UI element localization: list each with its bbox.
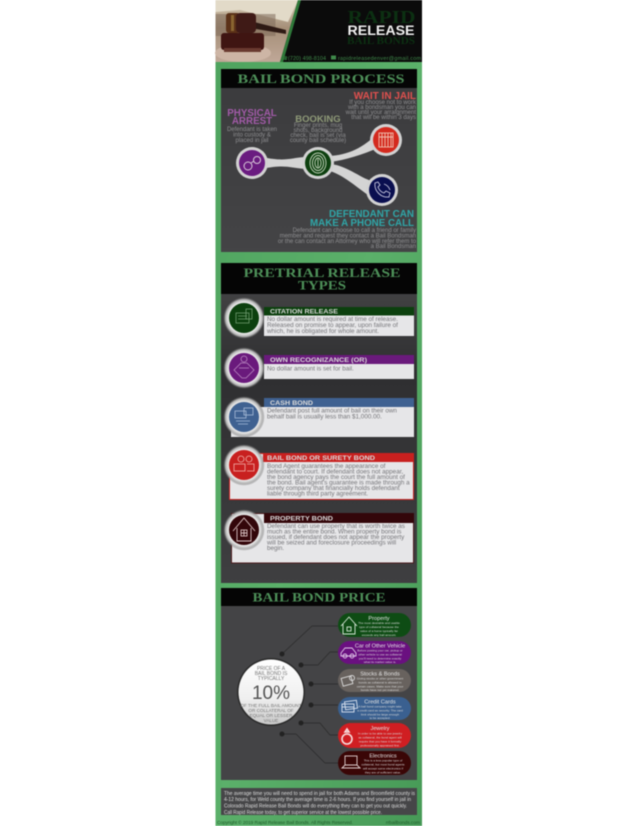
step: physical arrest: placed in jail xyxy=(235,138,269,144)
icon: car xyxy=(341,648,356,658)
card: property bond: begin. xyxy=(267,545,284,552)
panel: pretrial release types xyxy=(221,263,417,583)
step: defendant can make a phone call: a Bail Bondsman xyxy=(371,244,416,250)
text block: average jail time xyxy=(221,788,417,816)
card: bail bond or surety bond: BAIL BOND OR SURETY BOND xyxy=(267,455,375,462)
central circle: 10 percent: VALUE xyxy=(264,718,278,723)
pill: property: exceeds any bail amount. xyxy=(362,633,396,637)
card: bail bond or surety bond: liable through third party agreement. xyxy=(267,490,368,498)
icon: house xyxy=(341,617,357,634)
pill: electronics: collateral, but most bond agents xyxy=(361,762,405,766)
step: physical arrest: Defendant is taken xyxy=(227,127,277,133)
step: wait in jail: with a bondsman you can xyxy=(347,105,416,111)
pill: car or other vehicle: Car of Other Vehicle xyxy=(355,644,405,650)
card: bail bond or surety bond: surety company that financially holds defendant xyxy=(267,485,400,492)
step: defendant can make a phone call xyxy=(278,174,417,250)
card: cash bond: CASH BOND xyxy=(270,400,313,407)
pill: credit cards xyxy=(338,697,411,720)
panel: bail bond price xyxy=(221,588,417,780)
icon: house xyxy=(233,518,255,541)
contact line: ☎ xyxy=(281,55,289,62)
icon: jail bars xyxy=(379,133,393,147)
footer: copyright xyxy=(217,819,420,826)
text block: average jail time: Call Rapid Release today, to get superior service at the lowest possible price. xyxy=(224,810,382,816)
step: wait in jail: WAIT IN JAIL xyxy=(354,91,416,102)
heading: pretrial release types: TYPES xyxy=(298,278,346,292)
pill: credit cards: to be accepted. xyxy=(370,716,391,720)
card: citation release: CITATION RELEASE xyxy=(270,308,339,316)
panel: bail bond process xyxy=(221,69,417,252)
card: bail bond or surety bond: the bond agency pays the court the full amount of xyxy=(267,474,405,481)
step: booking: shots, background xyxy=(293,128,343,134)
icon: fingerprint xyxy=(310,153,326,173)
step: physical arrest: into custody & xyxy=(233,132,271,138)
step: booking: Finger prints, mug xyxy=(294,123,342,129)
pill: car or other vehicle: you'll need to determine exactly xyxy=(359,656,402,660)
card: bail bond or surety bond xyxy=(224,444,414,500)
heading: pretrial release types: PRETRIAL RELEASE xyxy=(244,265,400,280)
heading: bail bond price xyxy=(221,588,417,606)
step: defendant can make a phone call: member and request they contact a Bail Bondsman xyxy=(280,234,416,240)
card: property bond: issued, if defendant does not appear the property xyxy=(267,534,405,541)
contact line: rapidreleasedenver@gmail.com xyxy=(338,56,422,62)
step: physical arrest: ARREST xyxy=(232,116,272,127)
pill: electronics xyxy=(338,751,411,775)
header banner xyxy=(215,0,422,62)
icon: laptop xyxy=(342,756,360,768)
icon: handcuffs xyxy=(244,156,260,170)
central circle: 10 percent xyxy=(237,658,305,726)
pill: jewelry xyxy=(338,723,411,748)
central circle: 10 percent: TYPICALLY xyxy=(258,676,285,682)
pill: electronics: will accept some electronics if xyxy=(363,766,403,770)
card: citation release: which, he is obligated for whole amount. xyxy=(266,328,379,335)
heading: bail bond process xyxy=(221,69,417,88)
logo text xyxy=(347,7,416,47)
card: bail bond or surety bond: defendant to court. If defendant does not appear, xyxy=(267,468,403,476)
pill: property: type of collateral because the xyxy=(359,625,399,629)
icon: agents xyxy=(234,456,254,471)
pill: property: value of a home typically far xyxy=(360,629,398,633)
card: own recognizance: No dollar amount is set for bail. xyxy=(267,366,354,372)
pill: car or other vehicle xyxy=(338,641,411,664)
header photo: gavel xyxy=(215,0,298,62)
pill: jewelry: as collateral, the bond agent will xyxy=(358,736,402,740)
card: cash bond: behalf bail is usually less than $1,000.00. xyxy=(267,414,382,420)
text block: average jail time: 4-12 hours, for Weld county the average time is 2-6 hours. If you find yourself in jail in xyxy=(224,797,411,803)
card: bail bond or surety bond: the bond. Bail agent's guarantee is made through a xyxy=(267,480,410,486)
icon: ring xyxy=(342,729,352,744)
card: citation release: No dollar amount is required at time of release. xyxy=(267,316,398,323)
logo text: BAIL BONDS xyxy=(347,36,415,47)
pill: stocks and bonds: bonds as collateral is allowed in xyxy=(359,680,402,684)
footer: copyright: rrbailbonds.com xyxy=(386,820,420,826)
icon: credit cards xyxy=(342,700,357,712)
card: property bond: Defendant can use property that is worth twice as xyxy=(267,523,405,530)
connectors between steps xyxy=(262,135,380,195)
green diagonal stripe xyxy=(280,0,301,62)
footer: copyright: Copyright © 2019 Rapid Release Bail Bonds. All Rights Reserved. xyxy=(217,819,353,826)
step: booking xyxy=(290,114,346,179)
pill: property: Property xyxy=(368,616,390,622)
card: property bond: PROPERTY BOND xyxy=(270,516,333,522)
logo text: RAPID xyxy=(348,7,416,27)
central circle: 10 percent: 10% xyxy=(252,683,290,704)
pill: stocks and bonds: bonds have not yet matured. xyxy=(361,688,399,692)
card: own recognizance xyxy=(224,348,414,388)
card: cash bond xyxy=(224,396,414,438)
pill: credit cards: a credit card as security. The card xyxy=(357,708,403,712)
card: property bond: much as the entire bond. When property bond is xyxy=(267,528,401,536)
pill: stocks and bonds: Stocks & Bonds xyxy=(360,672,400,678)
pill: stocks and bonds: Giving stocks or other government xyxy=(357,676,403,680)
icon: cash xyxy=(235,408,253,424)
logo text: RELEASE xyxy=(348,23,414,38)
card: property bond: will be seized and foreclosure proceedings will xyxy=(266,540,396,546)
step: wait in jail: that will be within 3 days xyxy=(351,115,416,121)
pill: stocks and bonds: certain cases. Make sure that your xyxy=(357,684,403,688)
card: own recognizance: OWN RECOGNIZANCE (OR) xyxy=(270,357,367,364)
pill: electronics: Electronics xyxy=(369,754,397,760)
central circle: 10 percent: BAIL BOND IS xyxy=(255,671,288,677)
card: bail bond or surety bond: Bond Agent guarantees the appearance of xyxy=(267,463,386,470)
step: physical arrest xyxy=(227,108,277,179)
pill: electronics: they are of sufficient value. xyxy=(365,770,401,774)
pill: jewelry: professionally appraised first. xyxy=(360,744,400,748)
pill: credit cards: Credit Cards xyxy=(364,700,396,706)
central circle: 10 percent: OF THE FULL BAIL AMOUNT xyxy=(240,703,302,708)
card: property bond xyxy=(224,510,414,563)
card: cash bond: Defendant post full amount of bail on their own xyxy=(267,408,397,414)
central circle: 10 percent: PRICE OF A xyxy=(257,666,286,672)
step: wait in jail xyxy=(345,91,417,156)
card: citation release: Released on promise to appear, upon failure of xyxy=(267,322,398,329)
pill: credit cards: limit should be large enough xyxy=(361,712,399,716)
step: defendant can make a phone call: MAKE A PHONE CALL xyxy=(310,218,414,229)
central circle: 10 percent: EQUAL OR LESSER xyxy=(250,713,293,718)
pill: jewelry: Jewelry xyxy=(371,726,390,732)
pill: property xyxy=(338,613,411,637)
green page background xyxy=(216,62,422,826)
heading: pretrial release types xyxy=(221,263,417,294)
step: booking: check, bail is set (via xyxy=(290,133,346,139)
text block: average jail time: The average time you will need to spend in jail for both Adams and Broomfield county is xyxy=(224,791,415,797)
pill: electronics: This is a less popular type of xyxy=(364,758,402,762)
step: defendant can make a phone call: Defendant can choose to call a friend or family xyxy=(293,228,416,234)
pill: jewelry: require that you have it formally xyxy=(359,740,402,744)
central circle: 10 percent: OR COLLATERAL OF xyxy=(248,708,294,713)
icon: citation document xyxy=(236,309,252,323)
pill: credit cards: A bail bond company might take xyxy=(358,704,402,708)
pill: stocks and bonds xyxy=(338,669,411,692)
step: wait in jail: wait until your arraignment xyxy=(345,110,416,116)
contact line: (720) 498-8104 xyxy=(288,56,326,62)
step: wait in jail: If you choose not to work xyxy=(349,100,417,106)
pill: jewelry: In order to be able to use jewelry xyxy=(358,732,403,736)
connector lines xyxy=(280,626,338,763)
step: booking: BOOKING xyxy=(295,114,341,125)
icon: certificate xyxy=(341,676,354,686)
icon: phone xyxy=(375,182,390,197)
pill: car or other vehicle: other vehicle to use as collateral xyxy=(358,652,402,656)
heading: bail bond price: BAIL BOND PRICE xyxy=(252,590,386,604)
step: physical arrest: PHYSICAL xyxy=(227,108,277,119)
heading: bail bond process: BAIL BOND PROCESS xyxy=(238,72,405,86)
step: defendant can make a phone call: DEFENDANT CAN xyxy=(329,209,414,220)
contact line xyxy=(281,55,422,62)
step: booking: county bail schedule) xyxy=(290,138,346,144)
pill: property: The most desirable and usable xyxy=(358,621,400,625)
icon: handshake xyxy=(234,356,254,378)
pill: car or other vehicle: Before posting your car, pickup or xyxy=(357,648,403,652)
step: defendant can make a phone call: or the can contact an Attorney who will refer them to xyxy=(278,239,417,245)
text block: average jail time: Colorado Rapid Release Bail Bonds will do everything they can to get you out quickly. xyxy=(224,804,407,810)
pill: car or other vehicle: what its market value is. xyxy=(364,660,396,664)
card: citation release xyxy=(224,298,414,338)
